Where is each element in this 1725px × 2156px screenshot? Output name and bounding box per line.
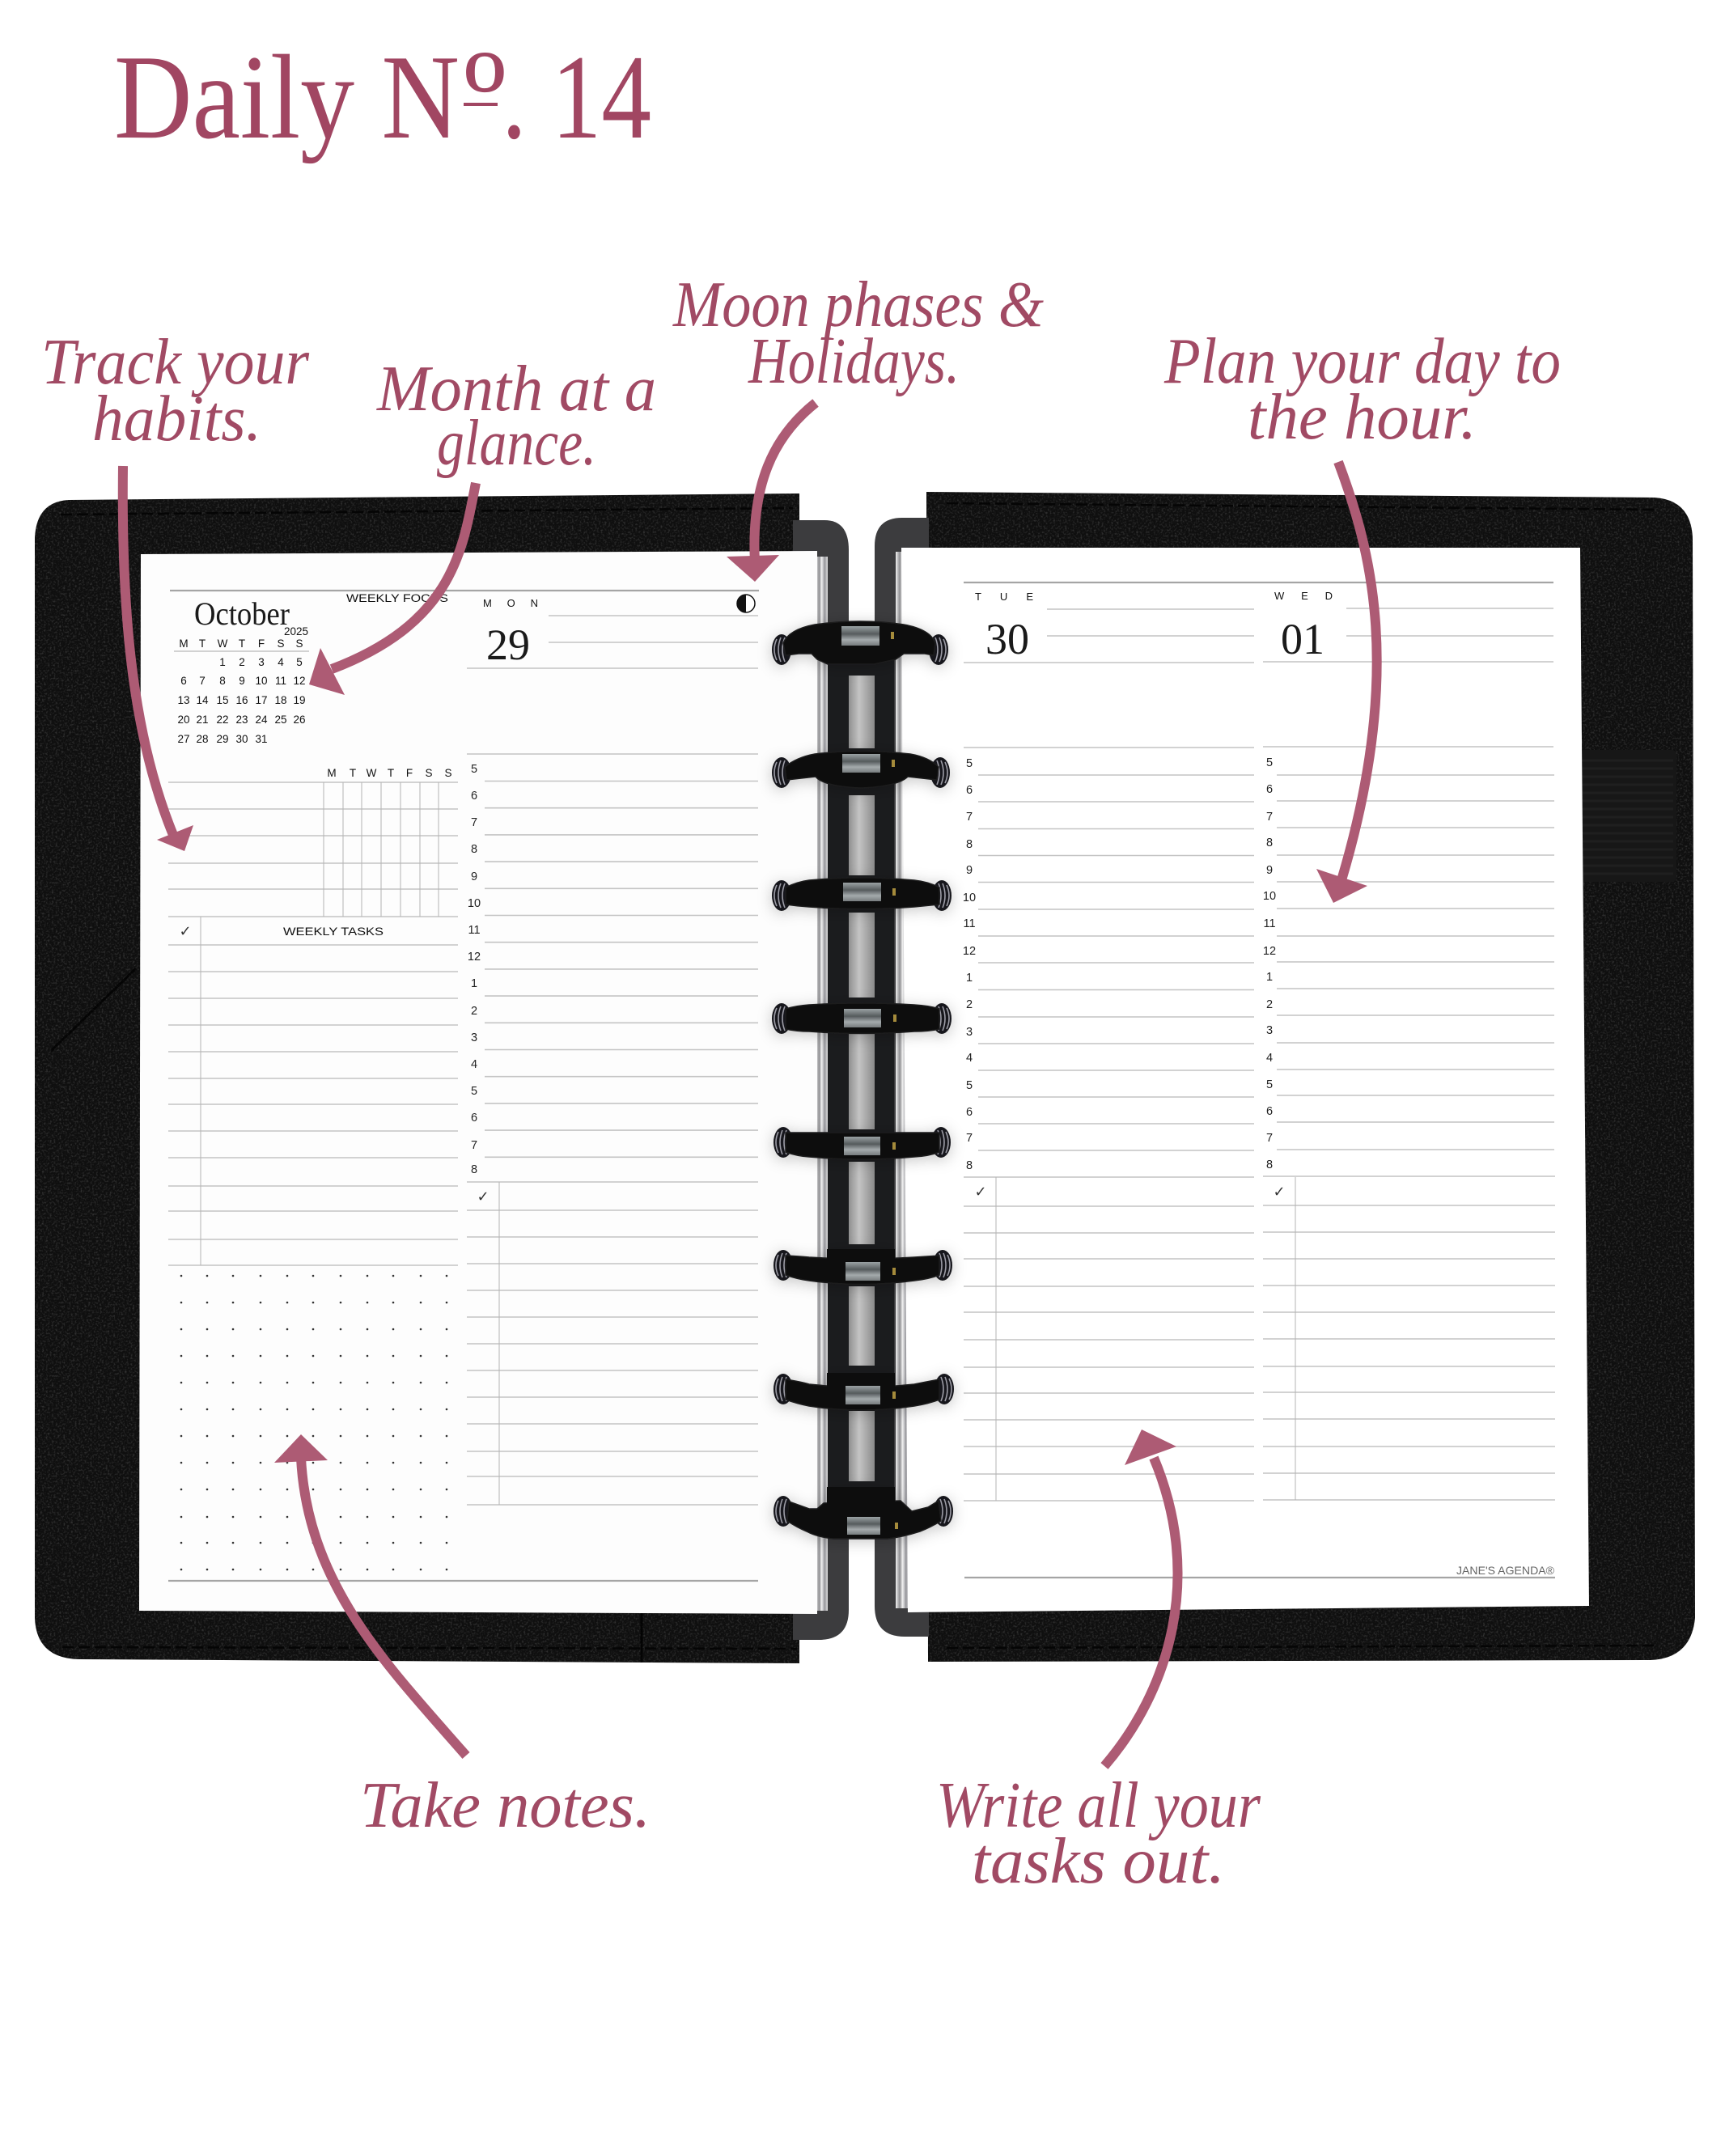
title: . 14 (502, 31, 651, 164)
tuesday column: 2 (966, 998, 973, 1011)
callout text: month at a glance: glance. (437, 408, 596, 479)
monday column: 9 (471, 870, 477, 883)
wednesday column: 7 (1266, 811, 1273, 824)
wednesday column: 9 (1266, 864, 1273, 877)
binding spine (827, 639, 894, 1525)
callout text: moon phases and holidays: Moon phases & (672, 269, 1044, 341)
wednesday column: 5 (1266, 1078, 1273, 1091)
weekly focus heading: WEEKLY FOCUS (346, 592, 448, 604)
tuesday column: 7 (966, 1132, 973, 1145)
mini calendar: 13 (177, 694, 190, 706)
arrow: moon phases (727, 403, 816, 582)
ring 8 (773, 1487, 953, 1539)
mini calendar: 22 (216, 714, 229, 726)
habit tracker grid: F (406, 767, 413, 779)
wednesday column: 6 (1266, 783, 1273, 796)
brand mark: JANE'S AGENDA® (1456, 1564, 1555, 1577)
ring 4 (772, 1003, 952, 1034)
callout text: plan your day: Plan your day to (1163, 326, 1561, 397)
tuesday column: ✓ (974, 1184, 987, 1201)
habit tracker grid: S (444, 767, 452, 779)
habit tracker grid: S (425, 767, 433, 779)
tuesday column: 11 (963, 917, 976, 930)
binder rings (772, 621, 954, 1539)
monday column: 7 (471, 816, 477, 829)
mini calendar: 24 (255, 714, 268, 726)
arrow: take notes (274, 1434, 466, 1756)
tuesday column: 8 (966, 1159, 973, 1172)
mini calendar: 27 (177, 733, 190, 745)
callout text: track your habits: habits. (92, 383, 261, 455)
tuesday column: 1 (966, 972, 973, 985)
tuesday column: 9 (966, 864, 973, 877)
wednesday column: 7 (1266, 1132, 1273, 1145)
callout text: month at a glance: Month at a (376, 354, 656, 425)
monday column: 1 (471, 977, 477, 990)
monday column: 29 (486, 621, 530, 669)
dot grid notes area (181, 1276, 447, 1569)
tuesday column (963, 591, 1254, 1501)
left cover tab plate (793, 520, 849, 1640)
wednesday column: 4 (1266, 1052, 1273, 1065)
mini calendar: 5 (296, 656, 303, 668)
mini calendar: 6 (180, 675, 187, 687)
monday column: 10 (468, 897, 481, 910)
callout text: moon phases and holidays: Holidays. (748, 326, 960, 397)
wednesday column: 01 (1281, 615, 1324, 663)
title: Daily N (114, 31, 460, 164)
mini calendar: F (258, 637, 265, 650)
monday column: 4 (471, 1058, 477, 1071)
mini calendar: 16 (235, 694, 248, 706)
mini calendar: 8 (219, 675, 226, 687)
monday column: 5 (471, 763, 477, 776)
wednesday column: 5 (1266, 756, 1273, 769)
arrow: track your habits (123, 466, 193, 851)
tuesday column: 12 (963, 945, 976, 958)
mini calendar: 3 (258, 656, 265, 668)
mini calendar: 4 (278, 656, 284, 668)
callout text: take notes: Take notes. (360, 1770, 651, 1841)
wednesday column: 3 (1266, 1024, 1273, 1037)
mini calendar: 14 (196, 694, 209, 706)
wednesday column: 11 (1263, 917, 1276, 930)
monday column: M O N (483, 597, 538, 609)
mini calendar: 21 (196, 714, 209, 726)
mini calendar: 10 (255, 675, 268, 687)
monday column: 11 (468, 924, 481, 937)
panel: left planner page (139, 551, 817, 1614)
ring 6 (773, 1249, 952, 1285)
bottom rule (168, 1580, 758, 1582)
ring 7 (773, 1373, 954, 1410)
wednesday column: W E D (1274, 590, 1333, 602)
habit tracker grid (168, 767, 458, 917)
arrow: plan your day (1316, 462, 1377, 903)
wednesday column: 1 (1266, 971, 1273, 984)
wednesday column: 8 (1266, 1158, 1273, 1171)
tuesday column: 6 (966, 1106, 973, 1119)
mini calendar: 26 (293, 714, 306, 726)
bottom rule (964, 1577, 1555, 1578)
wednesday column: 2 (1266, 998, 1273, 1011)
tuesday column: 10 (963, 892, 976, 904)
top rule (964, 582, 1553, 583)
title: º (464, 22, 506, 174)
monday column: 12 (468, 951, 481, 964)
elastic pen loop (1578, 750, 1676, 882)
wednesday column: 12 (1263, 945, 1276, 958)
tuesday column: 5 (966, 1079, 973, 1092)
wednesday column: ✓ (1273, 1184, 1286, 1201)
monday column: 6 (471, 790, 477, 803)
mini calendar: 23 (235, 714, 248, 726)
habit tracker grid: T (350, 767, 356, 779)
mini calendar: 9 (239, 675, 245, 687)
callout text: track your habits (41, 327, 310, 455)
tuesday column: 8 (966, 838, 973, 851)
habit tracker grid: M (327, 767, 337, 779)
arrow: month at a glance (309, 483, 476, 695)
title (114, 22, 651, 174)
wednesday column: 10 (1263, 890, 1276, 903)
monday column: 2 (471, 1005, 477, 1018)
mini calendar: T (239, 637, 245, 650)
tuesday column: 5 (966, 757, 973, 770)
mini calendar: T (199, 637, 206, 650)
tuesday column: 7 (966, 811, 973, 824)
mini calendar: 18 (274, 694, 287, 706)
mini calendar: S (295, 637, 303, 650)
mini calendar: M (179, 637, 189, 650)
icon: moon phase (737, 595, 755, 612)
right cover tab plate (875, 518, 929, 1637)
right page stack edge (896, 552, 909, 1608)
monday column: 7 (471, 1139, 477, 1152)
callout text: plan your day: the hour. (1248, 382, 1477, 453)
tuesday column: 4 (966, 1052, 973, 1065)
mini calendar: 30 (235, 733, 248, 745)
mini calendar: 11 (275, 675, 286, 687)
monday column: 8 (471, 1163, 477, 1176)
left page stack edge (816, 557, 828, 1611)
weekly tasks list (168, 917, 458, 1265)
tuesday column: 30 (985, 615, 1029, 663)
mini calendar: 28 (196, 733, 209, 745)
callout text: write all your tasks out: tasks out. (972, 1826, 1225, 1897)
habit tracker grid: T (388, 767, 394, 779)
mini calendar: W (218, 637, 228, 650)
mini calendar: 31 (255, 733, 268, 745)
ring 1 (772, 621, 948, 665)
tuesday column: 6 (966, 784, 973, 797)
mini calendar: S (277, 637, 285, 650)
tuesday column: T U E (975, 591, 1033, 603)
ring 5 (773, 1127, 951, 1159)
top rule (170, 590, 759, 591)
mini calendar: 25 (274, 714, 287, 726)
monday column: 3 (471, 1031, 477, 1044)
monday column: 6 (471, 1112, 477, 1125)
monday column: 8 (471, 843, 477, 856)
callout text: write all your tasks out (936, 1770, 1261, 1897)
weekly tasks list: WEEKLY TASKS (283, 926, 384, 938)
mini calendar (174, 595, 309, 745)
monday column: 5 (471, 1085, 477, 1098)
wednesday column (1263, 590, 1555, 1500)
weekly tasks list: ✓ (179, 923, 192, 940)
callout text: track your habits: Track your (41, 327, 310, 398)
mini calendar: 2 (239, 656, 245, 668)
mini calendar: 7 (199, 675, 206, 687)
callout text: moon phases and holidays (672, 269, 1044, 397)
mini calendar: 15 (216, 694, 229, 706)
callout text: write all your tasks out: Write all your (936, 1770, 1261, 1841)
mini calendar: 2025 (284, 625, 308, 637)
mini calendar: 20 (177, 714, 190, 726)
wednesday column: 8 (1266, 837, 1273, 849)
arrow: write all your tasks (1104, 1430, 1178, 1766)
ring 3 (772, 878, 952, 911)
mini calendar: 29 (216, 733, 229, 745)
mini calendar: 17 (255, 694, 268, 706)
ring 2 (772, 751, 950, 788)
monday column: ✓ (477, 1188, 490, 1205)
callout text: month at a glance (376, 354, 656, 479)
panel: right planner page (901, 548, 1589, 1612)
mini calendar: 1 (219, 656, 226, 668)
habit tracker grid: W (367, 767, 377, 779)
callout text: plan your day (1163, 326, 1561, 453)
wednesday column: 6 (1266, 1105, 1273, 1118)
mini calendar: 19 (293, 694, 306, 706)
binder cover: right leather panel (922, 485, 1699, 1671)
monday column (467, 595, 758, 1505)
mini calendar: 12 (293, 675, 306, 687)
tuesday column: 3 (966, 1026, 973, 1039)
mini calendar: October (194, 595, 290, 632)
binder cover: left leather panel (32, 485, 809, 1671)
